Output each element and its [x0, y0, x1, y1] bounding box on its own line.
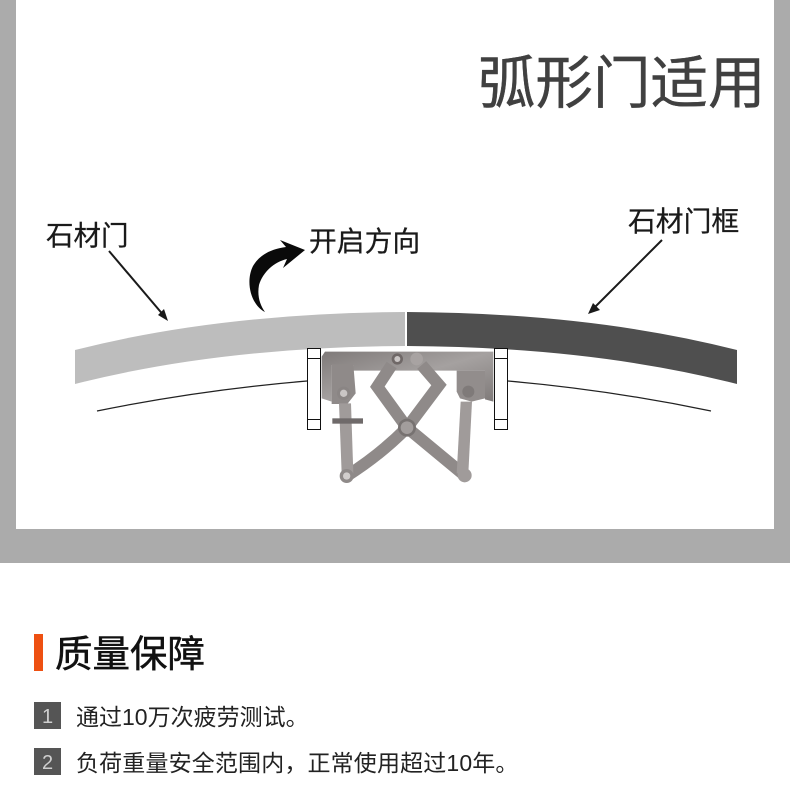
hinge rivets: [337, 353, 474, 483]
hinge right leg: [457, 402, 472, 473]
heading: quality assurance: 质量保障: [55, 633, 205, 675]
label: opening direction: 开启方向: [309, 226, 420, 257]
hinge left pin: [332, 418, 363, 424]
hinge left bracket: [332, 364, 356, 404]
right seal strip: [494, 348, 508, 430]
arrow: door frame pointer: [588, 240, 662, 314]
label: stone door frame: 石材门框: [628, 206, 739, 237]
door frame: dark grey arc: [407, 312, 737, 384]
arrow: stone door pointer: [109, 251, 168, 321]
accent bar: [34, 634, 43, 671]
hinge diamond arms: [347, 365, 465, 476]
inner arc line: right: [508, 381, 711, 411]
item 2 text: 负荷重量安全范围内，正常使用超过10年。: [76, 750, 519, 776]
door: light grey arc: [75, 312, 405, 384]
hinge mechanism: [322, 352, 493, 483]
hinge top plate: [322, 352, 493, 402]
hinge right bracket: [457, 371, 485, 402]
badge 2: 2: [42, 752, 53, 774]
item 1 text: 通过10万次疲劳测试。: [76, 704, 309, 730]
badge 1: [34, 702, 61, 729]
arrow: opening direction: [249, 240, 305, 312]
panel: arc door diagram frame: [0, 0, 790, 563]
left seal strip: [308, 348, 320, 430]
inner arc line: left: [97, 381, 307, 411]
label: stone door: 石材门: [46, 220, 128, 251]
badge 2: [34, 748, 61, 775]
badge 1: 1: [42, 706, 53, 728]
hinge left leg: [339, 403, 353, 473]
title: 弧形门适用: [478, 52, 766, 116]
